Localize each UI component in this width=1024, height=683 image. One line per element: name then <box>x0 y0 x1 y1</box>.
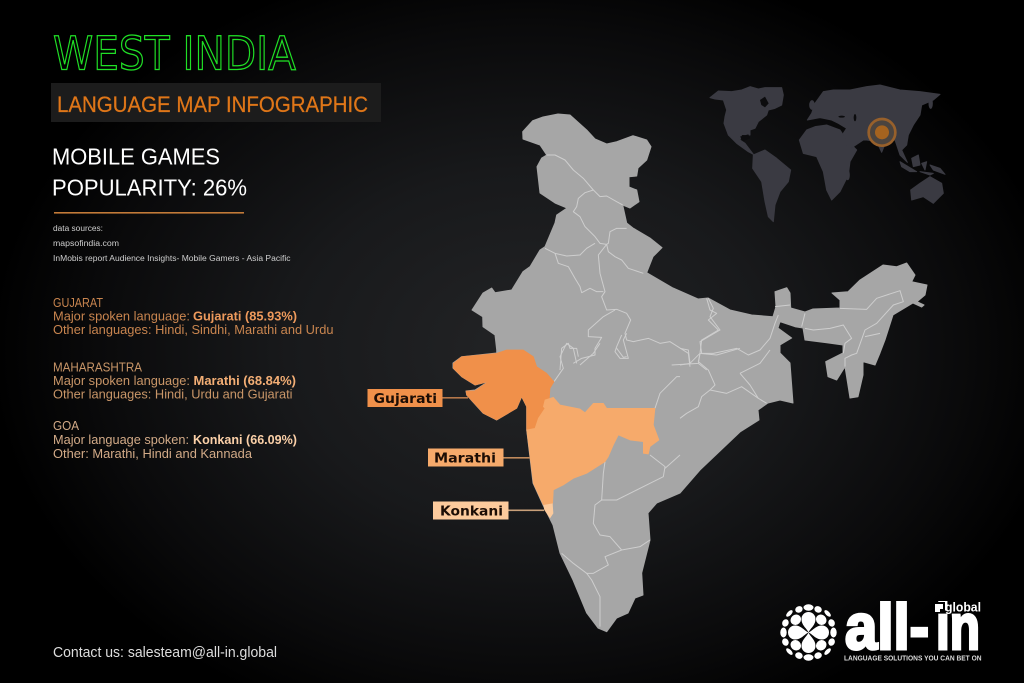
text block: Gujarat: Other languages: Hindi, Sindhi, Marathi and Urdu <box>53 322 334 337</box>
world map locator <box>710 85 945 222</box>
text block: Goa: Konkani (66.09%) <box>193 432 297 447</box>
contact line: Contact us: salesteam@all-in.global <box>53 645 277 661</box>
wordmark <box>845 591 980 663</box>
label: Gujarati <box>368 389 468 407</box>
text block: Gujarat: GUJARAT <box>53 295 103 310</box>
text block: Goa <box>53 418 297 461</box>
title: WEST INDIA <box>53 26 296 80</box>
label: Marathi: Marathi <box>434 450 496 466</box>
data sources: mapsofindia.com <box>53 239 119 248</box>
text block: Maharashtra: Marathi (68.84%) <box>194 373 296 388</box>
text block: Gujarat: Major spoken language: <box>53 308 190 324</box>
state borders east <box>680 291 903 418</box>
Gujarat state <box>453 350 554 430</box>
mobile games statistic: POPULARITY: 26% <box>52 174 247 200</box>
data sources: InMobis report Audience Insights- Mobile Gamers - Asia Pacific <box>53 254 290 263</box>
text block: Goa: Other: Marathi, Hindi and Kannada <box>53 446 253 461</box>
wordmark: all- <box>845 591 929 663</box>
data sources <box>53 224 290 263</box>
text block: Goa: Major language spoken: <box>53 432 189 447</box>
state borders north <box>545 155 740 370</box>
Goa state <box>543 503 553 518</box>
logo <box>780 591 982 663</box>
text block: Maharashtra: MAHARASHTRA <box>53 360 142 374</box>
wordmark suffix: global <box>945 600 981 614</box>
subtitle banner <box>51 83 381 122</box>
mobile games statistic <box>52 144 247 200</box>
target marker <box>869 119 895 146</box>
label: Gujarati: Gujarati <box>374 391 437 407</box>
text block: Goa: GOA <box>53 418 79 433</box>
mobile games statistic: MOBILE GAMES <box>52 144 220 170</box>
text block: Gujarat <box>53 295 334 337</box>
label: Konkani <box>433 502 544 520</box>
text block: Maharashtra: Major spoken language: <box>53 373 190 388</box>
Maharashtra state <box>527 397 659 505</box>
icon: globe <box>780 604 837 661</box>
India base shape <box>453 114 927 632</box>
data sources: data sources: <box>53 224 103 233</box>
text block: Maharashtra <box>53 360 296 402</box>
subtitle banner: LANGUAGE MAP INFOGRAPHIC <box>57 92 368 117</box>
state borders south <box>554 343 680 627</box>
label: Marathi <box>428 448 530 466</box>
tagline: LANGUAGE SOLUTIONS YOU CAN BET ON <box>844 654 982 662</box>
label: Konkani: Konkani <box>440 504 503 520</box>
map of India <box>453 114 927 632</box>
text block: Gujarat: Gujarati (85.93%) <box>193 308 297 324</box>
text block: Maharashtra: Other languages: Hindi, Urdu and Gujarati <box>53 386 293 402</box>
wordmark: in <box>936 591 980 663</box>
